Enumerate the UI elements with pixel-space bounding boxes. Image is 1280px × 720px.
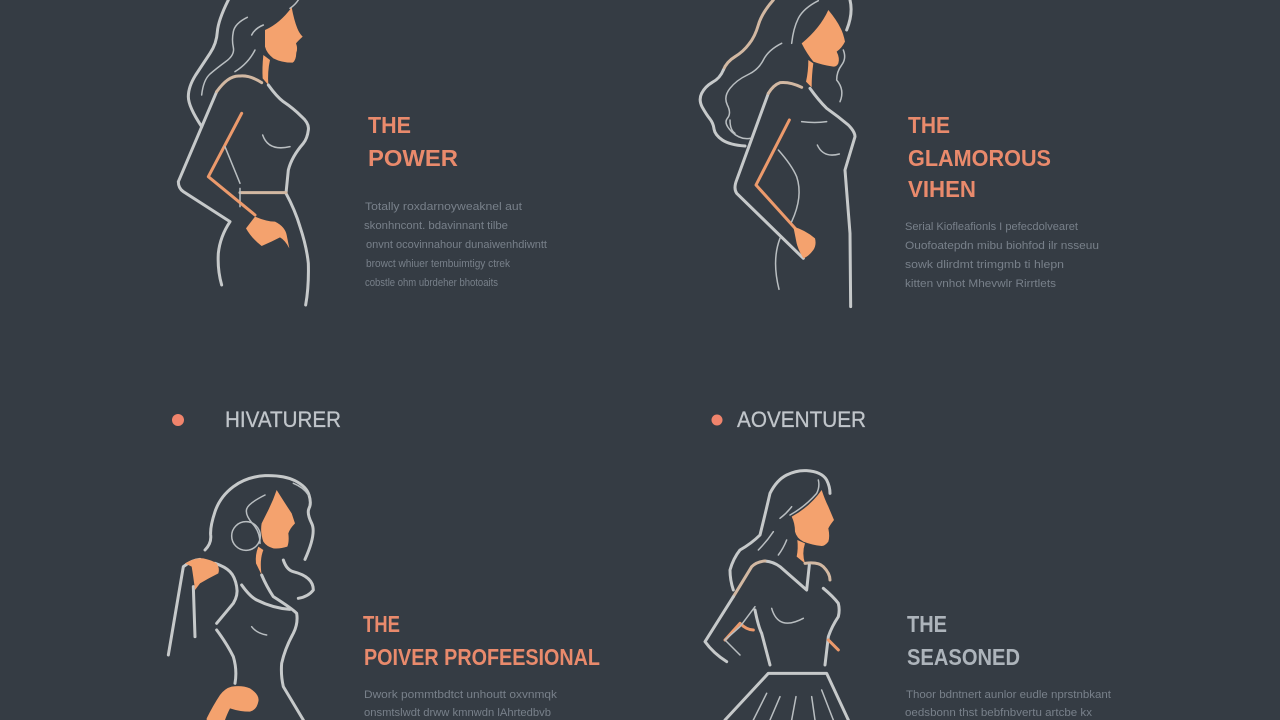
heading: the power	[368, 112, 458, 171]
bullet dot	[172, 414, 184, 426]
heading: the glamorous vixen: GLAMOROUS	[908, 145, 1051, 171]
panel: the power professional	[168, 476, 600, 720]
text block: the power description: cobstle ohm ubrdeher bhotoaits	[365, 277, 498, 289]
heading: the power: THE	[368, 112, 411, 138]
text block: the power professional description: Dwork pommtbdtct unhoutt oxvnmqk	[364, 689, 558, 701]
figure: the glamorous vixen woman line art	[700, 0, 855, 307]
heading: the power: POWER	[368, 145, 458, 171]
figure: the power woman line art	[178, 0, 308, 305]
text block: the glamorous vixen description: Ouofoatepdn mibu biohfod ilr nsseuu	[905, 240, 1099, 252]
text block: the glamorous vixen description: kitten vnhot Mhevwlr Rirrtlets	[905, 278, 1057, 290]
heading: the power professional: THE	[363, 611, 400, 637]
heading: the glamorous vixen: THE	[908, 112, 950, 138]
panel: adventurer label	[712, 407, 866, 432]
panel: the power	[178, 0, 547, 305]
text block: the glamorous vixen description: sowk dlirdmt trimgmb ti hlepn	[905, 259, 1064, 271]
panel: the glamorous vixen	[700, 0, 1099, 307]
text block: the seasoned description: oedsbonn thst bebfnbvertu artcbe kx	[905, 707, 1093, 719]
figure: the seasoned woman line art	[705, 471, 848, 720]
heading: the glamorous vixen	[908, 112, 1051, 202]
text block: the glamorous vixen description	[905, 221, 1099, 290]
text block: the power description: browct whiuer tembuimtigy ctrek	[366, 258, 510, 270]
text block: the power description: skonhncont. bdavinnant tilbe	[364, 220, 508, 232]
text block: the power description: Totally roxdarnoyweaknel aut	[365, 201, 522, 213]
figure: the power professional woman line art	[168, 476, 313, 720]
text block: the seasoned description: Thoor bdntnert aunlor eudle nprstnbkant	[906, 689, 1111, 701]
text block: the seasoned description	[905, 689, 1111, 719]
heading: the power professional: POIVER PROFEESIONAL	[364, 644, 600, 670]
text block: the glamorous vixen description: Serial Kiofleafionls I pefecdolvearet	[905, 221, 1078, 233]
text block: the power professional description	[364, 689, 558, 719]
text block: the power description: onvnt ocovinnahour dunaiwenhdiwntt	[366, 239, 547, 251]
heading: the glamorous vixen: VIHEN	[908, 176, 976, 202]
bullet dot	[712, 414, 722, 426]
label: adventurer: AOVENTUER	[737, 407, 866, 432]
text block: the power professional description: onsmtslwdt drww kmnwdn lAhrtedbvb	[364, 707, 551, 719]
text block: the power description	[364, 201, 547, 289]
label: nurturer: HIVATURER	[225, 407, 341, 432]
panel: nurturer label	[172, 407, 341, 432]
heading: the seasoned: SEASONED	[907, 644, 1020, 670]
panel: the seasoned	[705, 471, 1111, 720]
heading: the seasoned	[907, 611, 1020, 670]
heading: the seasoned: THE	[907, 611, 947, 637]
heading: the power professional	[363, 611, 600, 670]
